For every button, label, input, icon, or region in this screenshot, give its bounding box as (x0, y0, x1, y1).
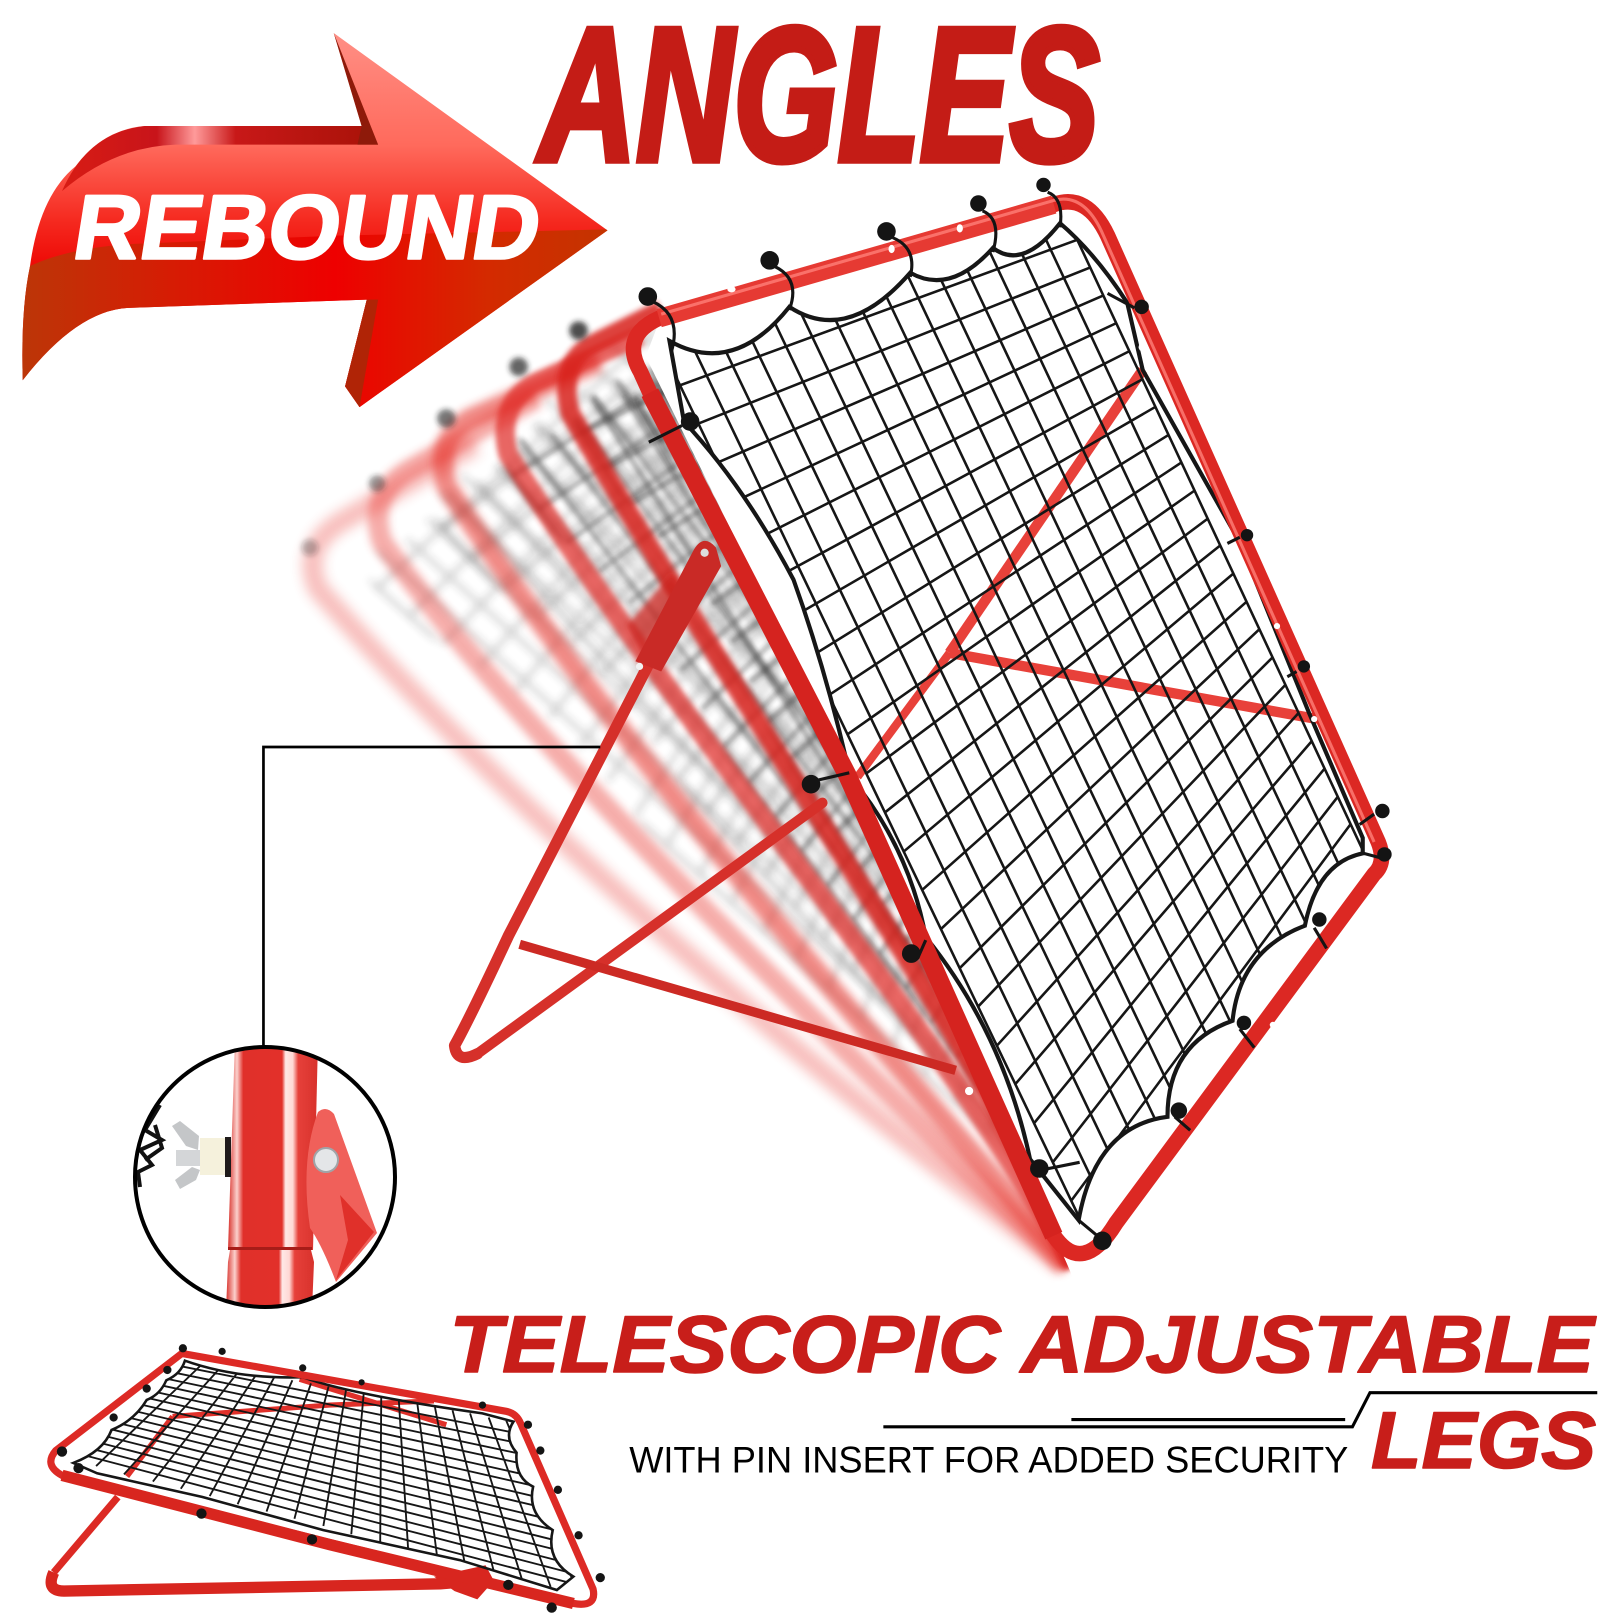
small net border (73, 1361, 573, 1590)
ghost knobs (302, 321, 588, 556)
ghost net 4 (586, 380, 935, 994)
bracket fold (336, 1195, 374, 1280)
small net frame (51, 1353, 594, 1604)
bracket pin (700, 549, 709, 557)
bracket bolt (314, 1148, 338, 1172)
ghost rail 4 (505, 336, 1072, 1266)
hinge bracket (306, 1109, 377, 1282)
main net (661, 212, 1364, 1240)
top rail thickening (659, 205, 1054, 318)
frame tube (633, 202, 1382, 1254)
ghost rail 5 (567, 310, 1074, 1266)
small net base bracket (434, 1565, 494, 1599)
lower tube (226, 1250, 314, 1310)
inset contents (138, 1040, 377, 1310)
arrow head back edge (334, 33, 378, 145)
tube collar shadow (228, 1247, 312, 1250)
slotted brace (520, 944, 956, 1070)
wing nut lower wing (175, 1167, 200, 1189)
ghost net 2 (434, 356, 986, 1113)
bracket shadow plate (627, 573, 692, 661)
ghost net 3 (504, 377, 970, 1078)
arrow lower shaded band (0, 229, 610, 413)
rear cross bars (858, 370, 1317, 777)
wing nut upper wing (172, 1121, 199, 1150)
callout leader line (263, 747, 600, 1050)
main red frame (633, 199, 1382, 1254)
small net base tube (51, 1572, 477, 1591)
left rail thickening (650, 393, 1054, 1236)
headline accent lines (883, 1393, 1597, 1427)
detail inset circle (135, 1040, 395, 1310)
upper tube (228, 1040, 318, 1250)
pin washer (225, 1137, 231, 1177)
small net rear bars (127, 1379, 446, 1476)
small flat net product view (51, 1344, 605, 1613)
support legs and brace (455, 541, 956, 1070)
small net bottom rail (62, 1475, 573, 1603)
headline: legs: LEGS (1371, 1396, 1596, 1486)
arrow head lower edge (345, 300, 378, 407)
leg bracket (635, 541, 721, 672)
net mesh (661, 212, 1364, 1240)
net tie knobs (638, 178, 1392, 1250)
net tuft (138, 1105, 162, 1187)
arrow body (22, 33, 607, 407)
ghost rail 2 (378, 398, 1064, 1266)
rear leg (455, 550, 708, 1058)
ghost net 1 (368, 328, 990, 1132)
leg pin (636, 663, 643, 670)
ghost rail 1 (312, 444, 1064, 1266)
red rebound arrow (0, 33, 610, 413)
small net knobs (57, 1344, 605, 1613)
pin spacer (200, 1138, 226, 1175)
ghost net 5 (631, 366, 851, 806)
small net upper leg (54, 1497, 118, 1572)
subheading: pin insert: WITH PIN INSERT FOR ADDED SECURITY (629, 1438, 1348, 1480)
rebound label: REBOUND (67, 177, 548, 278)
wing nut stud (176, 1150, 200, 1166)
arrow top rim (62, 126, 378, 191)
lower return leg (477, 803, 822, 1054)
small net mesh (88, 1366, 572, 1587)
ghost rail 3 (443, 362, 1069, 1266)
lower bar (949, 653, 1317, 719)
motion blur ghost positions (296, 298, 1071, 1279)
net border (669, 223, 1363, 1220)
diagonal bar (949, 370, 1143, 653)
inset ring (135, 1047, 395, 1307)
headline: telescopic adjustable: TELESCOPIC ADJUSTABLE (449, 1300, 1597, 1390)
diagonal bar lower (858, 653, 949, 777)
frame holes (727, 224, 1317, 1095)
frame highlight (661, 199, 1374, 842)
